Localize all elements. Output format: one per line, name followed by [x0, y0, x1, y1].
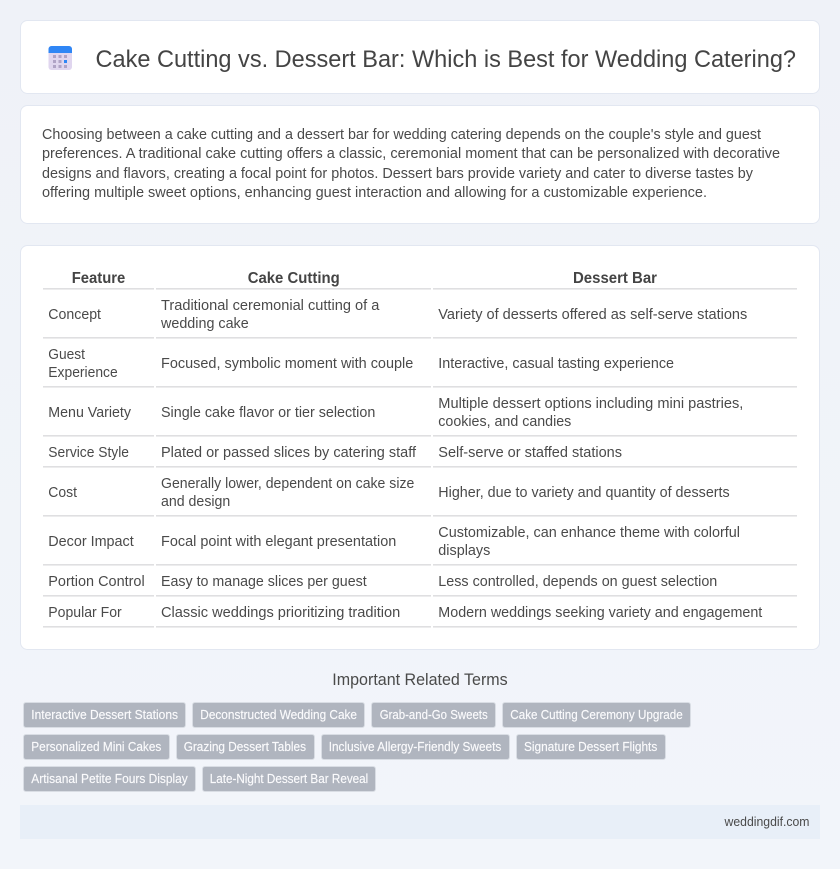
- row: concept: [48, 297, 747, 332]
- row: cost: [48, 475, 730, 510]
- row: menu variety: Multiple dessert options including mini pastries,: [438, 395, 743, 412]
- row: guest experience: Guest: [48, 346, 86, 363]
- row: concept: Traditional ceremonial cutting of a: [161, 297, 380, 314]
- tag: [372, 702, 496, 728]
- row: decor impact: Focal point with elegant presentation: [161, 533, 396, 550]
- tag: Artisanal Petite Fours Display: [31, 772, 188, 786]
- tag: [176, 734, 314, 760]
- row: decor impact: Decor Impact: [48, 533, 134, 550]
- row: guest experience: [48, 346, 674, 381]
- tag: Inclusive Allergy-Friendly Sweets: [329, 740, 501, 754]
- panel: comparison table: [20, 246, 820, 650]
- row: popular for: [48, 604, 763, 621]
- row: service style: [48, 444, 622, 461]
- row: cost: Cost: [48, 484, 78, 501]
- row: decor impact: [48, 524, 740, 559]
- footer bar: [20, 805, 820, 839]
- intro text block: [42, 126, 780, 201]
- tag: [192, 702, 364, 728]
- row: popular for: Modern weddings seeking variety and engagement: [438, 604, 763, 621]
- tag: [322, 734, 510, 760]
- intro text block: designs and flavors, creating a focal point for photos. Dessert bars provide variety and cater to diverse tastes by: [42, 165, 753, 182]
- tag: [24, 702, 186, 728]
- row: guest experience: Interactive, casual tasting experience: [438, 355, 674, 372]
- row: decor impact: Customizable, can enhance theme with colorful: [438, 524, 740, 541]
- row: service style: Service Style: [48, 444, 129, 461]
- row: concept: wedding cake: [160, 315, 249, 332]
- tag: Signature Dessert Flights: [524, 740, 657, 754]
- row: service style: Self-serve or staffed stations: [438, 444, 622, 461]
- row: cost: Generally lower, dependent on cake size: [161, 475, 414, 492]
- table header: Feature: [72, 270, 126, 287]
- row: cost: and design: [161, 493, 230, 510]
- row: menu variety: Single cake flavor or tier selection: [161, 404, 375, 421]
- row: portion control: Less controlled, depends on guest selection: [438, 573, 717, 590]
- row: guest experience: Focused, symbolic moment with couple: [161, 355, 413, 372]
- panel: header: [20, 20, 820, 94]
- tag: [502, 702, 690, 728]
- row: menu variety: cookies, and candies: [438, 413, 571, 430]
- panel: introduction: [20, 106, 820, 224]
- intro text block: preferences. A traditional cake cutting offers a classic, ceremonial moment that can be personalized with decorative: [42, 145, 780, 162]
- row: portion control: [48, 573, 717, 590]
- tag: [24, 766, 196, 792]
- tag group: related terms: [24, 702, 690, 792]
- tag: Personalized Mini Cakes: [31, 740, 161, 754]
- row: service style: Plated or passed slices by catering staff: [161, 444, 417, 461]
- tag: Interactive Dessert Stations: [31, 708, 178, 722]
- row: menu variety: [48, 395, 743, 430]
- tag: Grab-and-Go Sweets: [380, 708, 488, 722]
- tag: Deconstructed Wedding Cake: [200, 708, 357, 722]
- table header: [72, 270, 657, 287]
- table header: Cake Cutting: [248, 270, 340, 287]
- footer source text: weddingdif.com: [724, 814, 810, 829]
- tag: [516, 734, 666, 760]
- tag: Grazing Dessert Tables: [184, 740, 306, 754]
- tag: Cake Cutting Ceremony Upgrade: [510, 708, 683, 722]
- row: menu variety: Menu Variety: [48, 404, 131, 421]
- row: popular for: Classic weddings prioritizing tradition: [161, 604, 400, 621]
- tag: Late-Night Dessert Bar Reveal: [210, 772, 368, 786]
- section heading: related terms: Important Related Terms: [332, 671, 508, 689]
- row: concept: Concept: [48, 306, 102, 323]
- table header: Dessert Bar: [573, 270, 657, 287]
- row: cost: Higher, due to variety and quantity of desserts: [438, 484, 730, 501]
- row: popular for: Popular For: [48, 604, 122, 621]
- row: decor impact: displays: [438, 542, 490, 559]
- tag: [202, 766, 376, 792]
- title: Cake Cutting vs. Dessert Bar: Which is Best for Wedding Catering?: [96, 46, 796, 73]
- icon: calendar: [48, 46, 72, 70]
- tag: [24, 734, 170, 760]
- row: portion control: Portion Control: [48, 573, 145, 590]
- intro text block: offering multiple sweet options, enhancing guest interaction and allowing for a customizable experience.: [42, 184, 707, 201]
- intro text block: Choosing between a cake cutting and a dessert bar for wedding catering depends on the couple's style and guest: [42, 126, 762, 143]
- row: guest experience: Experience: [48, 364, 118, 381]
- row: concept: Variety of desserts offered as self-serve stations: [438, 306, 747, 323]
- row: portion control: Easy to manage slices per guest: [161, 573, 367, 590]
